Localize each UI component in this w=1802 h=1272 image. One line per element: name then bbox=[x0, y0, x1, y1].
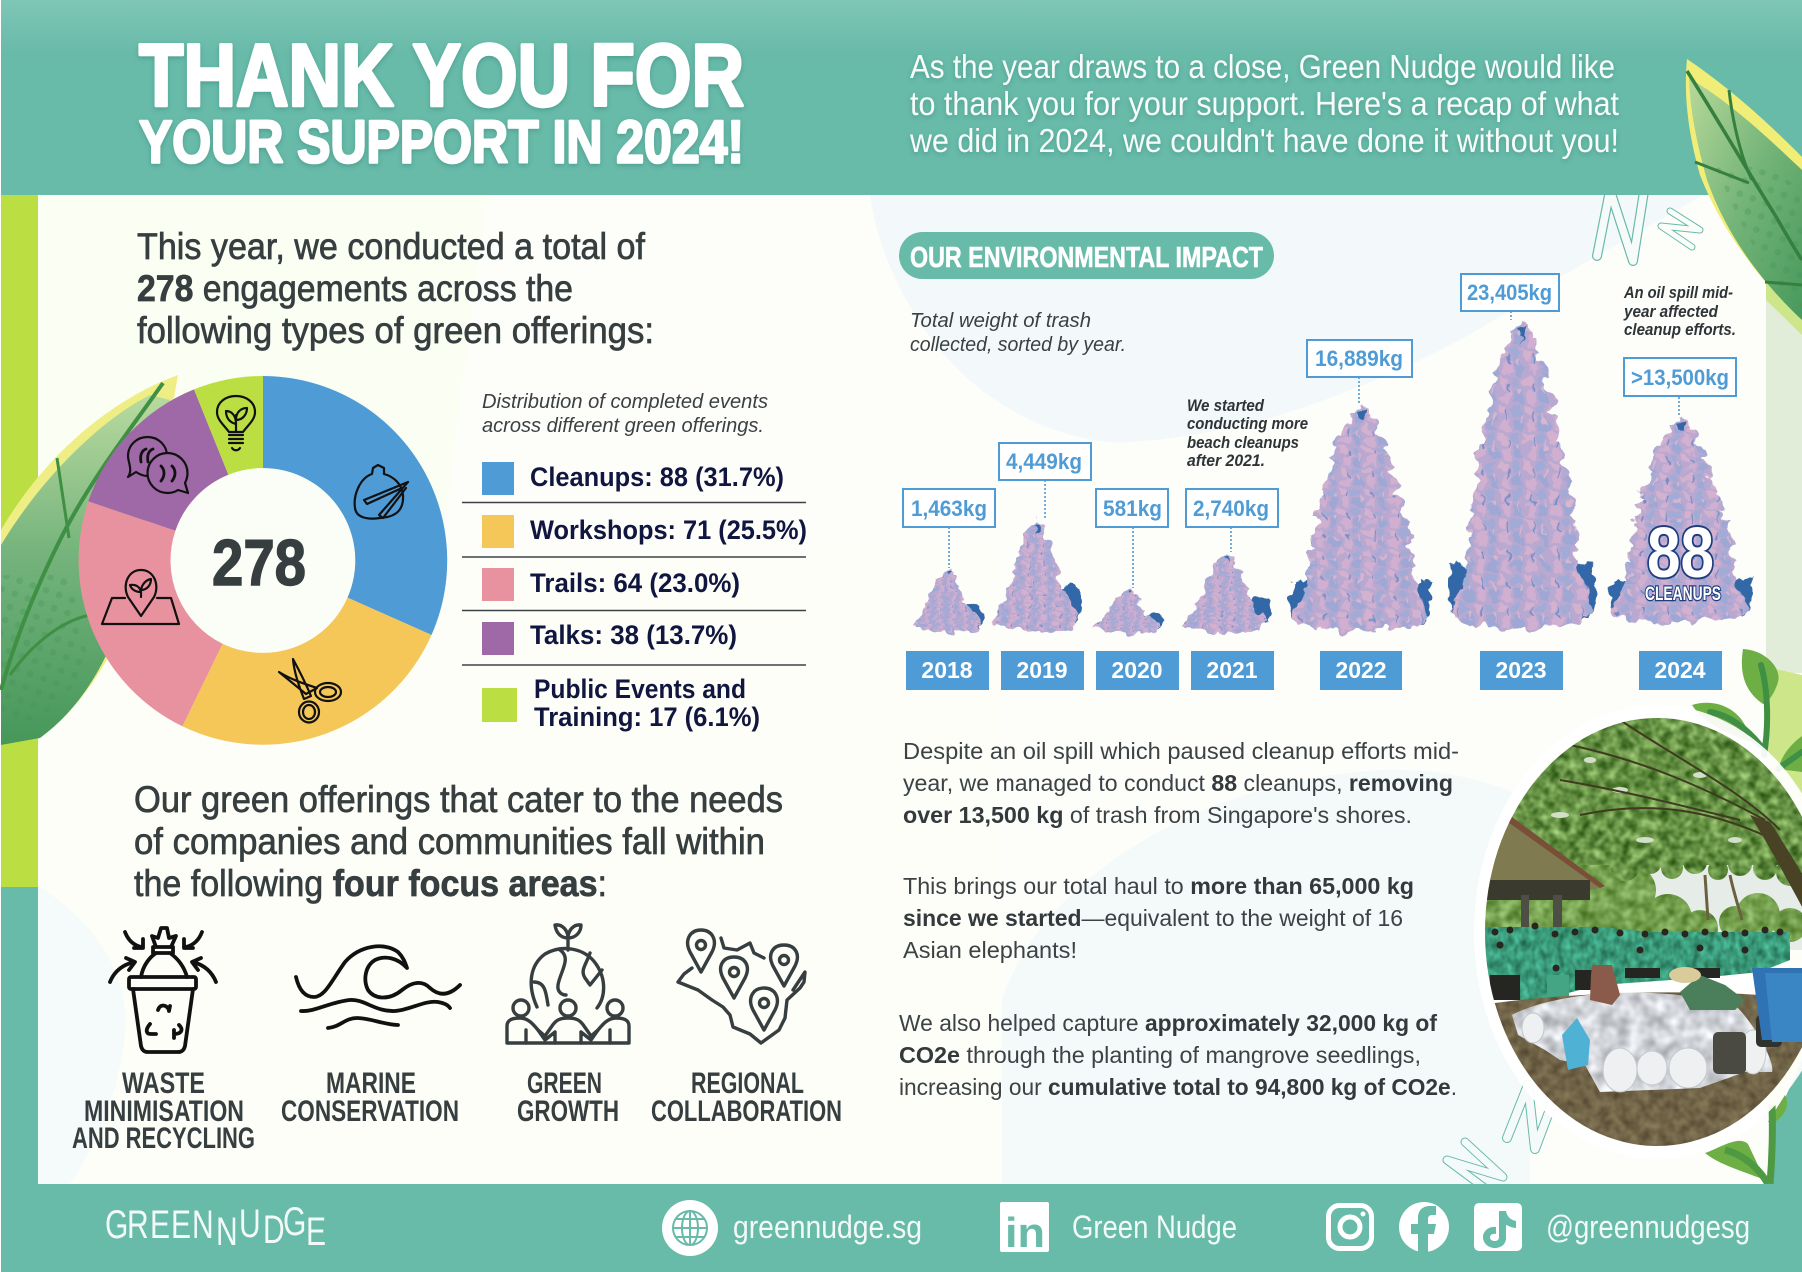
header intro text: to thank you for your support. Here's a recap of what bbox=[910, 85, 1619, 122]
column: 2020: 581kg bbox=[1103, 496, 1162, 521]
icon: globe, sprout and people bbox=[507, 925, 629, 1043]
icon: map pin with sprout bbox=[102, 570, 179, 624]
callout: 88 cleanups: 88 bbox=[1647, 514, 1714, 593]
column: 2019: 2019 bbox=[1016, 657, 1068, 683]
label bbox=[651, 1067, 842, 1128]
page background bbox=[1, 195, 1802, 1185]
text block: total haul: since we started—equivalent to the weight of 16 bbox=[903, 905, 1403, 931]
icon: plant right top bbox=[1692, 649, 1802, 772]
annotation: beach cleanups: conducting more bbox=[1187, 415, 1308, 433]
website link bbox=[662, 1200, 922, 1256]
text block: carbon capture bbox=[899, 1010, 1457, 1100]
legend: talks bbox=[482, 620, 737, 655]
title bbox=[139, 26, 744, 176]
text block: cleanups summary bbox=[903, 738, 1459, 828]
right pale green strip bbox=[1766, 283, 1802, 673]
label bbox=[72, 1067, 255, 1155]
focus area: waste minimisation and recycling bbox=[72, 928, 255, 1155]
focus area: marine conservation bbox=[281, 946, 460, 1128]
legend: public events and training bbox=[482, 674, 760, 732]
text block: carbon capture: increasing our cumulative total to 94,800 kg of CO2e. bbox=[899, 1074, 1457, 1100]
icon: facebook bbox=[1399, 1202, 1449, 1252]
heading: focus areas: Our green offerings that cater to the needs bbox=[134, 779, 783, 820]
label: AND RECYCLING bbox=[72, 1122, 255, 1155]
chart caption bbox=[910, 310, 1126, 356]
column: 2023: 23,405kg bbox=[1467, 280, 1552, 305]
legend: public events and training: Public Events and bbox=[534, 674, 746, 704]
title: THANK YOU FOR bbox=[139, 26, 744, 124]
lime side bar bbox=[1, 195, 38, 887]
legend: public events and training: Training: 17 (6.1%) bbox=[534, 702, 760, 732]
text block: total haul: Asian elephants! bbox=[903, 937, 1077, 963]
icon: tiktok bbox=[1474, 1203, 1522, 1251]
decorative outlined N letters top bbox=[1447, 185, 1700, 1192]
text block: cleanups summary: over 13,500 kg of trash from Singapore's shores. bbox=[903, 802, 1412, 828]
header band bbox=[1, 0, 1802, 195]
segment: talks bbox=[88, 389, 228, 531]
text block: carbon capture: We also helped capture approximately 32,000 kg of bbox=[899, 1010, 1437, 1036]
icon: speech bubbles with quotes bbox=[128, 437, 188, 493]
icon: trash bag and tongs bbox=[355, 465, 408, 519]
label bbox=[281, 1067, 459, 1128]
social media links: @greennudgesg bbox=[1546, 1209, 1750, 1245]
icon: wave bbox=[296, 946, 460, 1028]
header intro text: we did in 2024, we couldn't have done it without you! bbox=[909, 122, 1619, 159]
label: CONSERVATION bbox=[281, 1095, 459, 1128]
label: GROWTH bbox=[517, 1095, 619, 1128]
sky bbox=[1650, 865, 1802, 950]
heading: focus areas: of companies and communities fall within bbox=[134, 821, 765, 862]
icon: linkedin bbox=[1000, 1202, 1049, 1256]
website link: greennudge.sg bbox=[733, 1209, 922, 1245]
callout: 88 cleanups: CLEANUPS bbox=[1645, 584, 1721, 605]
linkedin link bbox=[1000, 1202, 1237, 1256]
annotation: beach cleanups bbox=[1187, 397, 1308, 470]
donut centre bbox=[171, 468, 355, 652]
segment: workshops bbox=[182, 598, 432, 745]
annotation: oil spill: cleanup efforts. bbox=[1624, 321, 1736, 339]
legend: workshops: Workshops: 71 (25.5%) bbox=[530, 515, 807, 545]
heading: engagements bbox=[137, 226, 654, 351]
legend: cleanups: Cleanups: 88 (31.7%) bbox=[530, 462, 784, 492]
column: 2022: 16,889kg bbox=[1315, 346, 1403, 371]
header intro text bbox=[909, 48, 1619, 159]
segment: trails bbox=[79, 501, 223, 726]
column: 2019 bbox=[992, 443, 1091, 690]
label: MINIMISATION bbox=[84, 1095, 244, 1128]
social media links bbox=[1328, 1202, 1750, 1252]
column: 2022 bbox=[1290, 340, 1433, 690]
column: 2024 bbox=[1609, 358, 1753, 690]
legend bbox=[462, 391, 807, 732]
label bbox=[517, 1067, 619, 1128]
column: 2019: 4,449kg bbox=[1006, 449, 1082, 474]
legend: talks: Talks: 38 (13.7%) bbox=[530, 620, 737, 650]
mid trees bbox=[1480, 840, 1802, 946]
column: 2021: 2021 bbox=[1206, 657, 1258, 683]
column: 2024: >13,500kg bbox=[1631, 365, 1729, 390]
right teal corner bbox=[1773, 1060, 1802, 1184]
tree canopy bbox=[1480, 710, 1802, 886]
focus area: green growth bbox=[507, 925, 629, 1128]
section heading pill: our environmental impact bbox=[899, 232, 1274, 279]
logo: Green Nudge: GREENNUDGE bbox=[105, 1200, 326, 1254]
segment: cleanups bbox=[263, 376, 447, 635]
segment: public events and training bbox=[194, 376, 263, 475]
icon: scissors bbox=[279, 659, 341, 722]
label: COLLABORATION bbox=[651, 1095, 842, 1128]
column: 2018: 1,463kg bbox=[911, 496, 987, 521]
linkedin link: Green Nudge bbox=[1072, 1209, 1237, 1245]
pale blue background bottom left bbox=[38, 885, 125, 1184]
icon: bin with bag and arrows bbox=[110, 928, 216, 1052]
column: 2024: 2024 bbox=[1654, 657, 1706, 683]
column: 2020: 2020 bbox=[1111, 657, 1163, 683]
column: 2021 bbox=[1183, 489, 1278, 690]
teal side bar bbox=[1, 887, 38, 1184]
text block: cleanups summary: year, we managed to conduct 88 cleanups, removing bbox=[903, 770, 1453, 796]
annotation: beach cleanups: after 2021. bbox=[1187, 452, 1265, 470]
icon: instagram bbox=[1328, 1206, 1372, 1248]
heading: focus areas bbox=[134, 779, 783, 904]
heading: engagements: This year, we conducted a total of bbox=[137, 226, 646, 267]
focus area: regional collaboration bbox=[651, 930, 842, 1128]
icon: light bulb with leaves bbox=[217, 396, 255, 450]
legend caption: Distribution of completed events bbox=[482, 391, 768, 413]
chart caption: collected, sorted by year. bbox=[910, 334, 1126, 356]
pavilion bbox=[1480, 817, 1605, 890]
column: 2022: 2022 bbox=[1335, 657, 1387, 683]
right lime strip bbox=[1766, 283, 1802, 1110]
icon: plant right bottom bbox=[1705, 1095, 1787, 1184]
column: 2018 bbox=[903, 489, 995, 690]
label: WASTE bbox=[122, 1067, 205, 1100]
left pale green background panel bbox=[38, 195, 488, 560]
legend: trails: Trails: 64 (23.0%) bbox=[530, 568, 740, 598]
pale blue background arc bottom bbox=[1002, 770, 1530, 1184]
column: 2021: 2,740kg bbox=[1193, 496, 1269, 521]
icon: map with pins bbox=[678, 930, 805, 1043]
icon: leaf top right bbox=[1686, 59, 1802, 320]
column: 2020 bbox=[1092, 489, 1179, 690]
icon: linkedin: in bbox=[1005, 1209, 1045, 1256]
legend caption: across different green offerings. bbox=[482, 415, 764, 437]
footer band bbox=[1, 1184, 1802, 1272]
column: 2023 bbox=[1448, 274, 1596, 690]
section heading pill: our environmental impact: OUR ENVIRONMENTAL IMPACT bbox=[910, 242, 1263, 274]
label: GREEN bbox=[527, 1067, 602, 1100]
column: 2018: 2018 bbox=[921, 657, 973, 683]
people bbox=[1482, 927, 1790, 1000]
icon: globe bbox=[662, 1200, 718, 1256]
photo: cleanup volunteers group bbox=[1474, 705, 1802, 1159]
heading: engagements: following types of green offerings: bbox=[137, 310, 654, 351]
ground bbox=[1482, 992, 1802, 1150]
annotation: oil spill: An oil spill mid- bbox=[1623, 284, 1733, 302]
chart caption: Total weight of trash bbox=[910, 310, 1091, 332]
icon: leaf left bbox=[1, 375, 178, 745]
annotation: beach cleanups: beach cleanups bbox=[1187, 434, 1299, 452]
legend caption bbox=[482, 391, 768, 437]
text block: cleanups summary: Despite an oil spill which paused cleanup efforts mid- bbox=[903, 738, 1459, 764]
text block: carbon capture: CO2e through the planting of mangrove seedlings, bbox=[899, 1042, 1421, 1068]
label: MARINE bbox=[326, 1067, 416, 1100]
heading: engagements: 278 engagements across the bbox=[137, 268, 573, 309]
label: REGIONAL bbox=[691, 1067, 804, 1100]
text block: total haul: This brings our total haul to more than 65,000 kg bbox=[903, 873, 1414, 899]
heading: focus areas: the following four focus areas: bbox=[134, 863, 607, 904]
pale blue background arc top bbox=[870, 195, 1700, 443]
text block: total haul bbox=[903, 873, 1414, 963]
header intro text: As the year draws to a close, Green Nudge would like bbox=[910, 48, 1615, 85]
annotation: oil spill: year affected bbox=[1623, 303, 1719, 321]
annotation: oil spill bbox=[1623, 284, 1736, 339]
donut chart bbox=[79, 376, 447, 745]
trash bags bbox=[1512, 993, 1772, 1092]
title: YOUR SUPPORT IN 2024! bbox=[139, 108, 744, 176]
annotation: beach cleanups: We started bbox=[1187, 397, 1265, 415]
donut total: 278 bbox=[212, 526, 306, 599]
sky gaps in canopy bbox=[1551, 757, 1742, 843]
pile chart: trash by year bbox=[903, 274, 1753, 690]
column: 2023: 2023 bbox=[1495, 657, 1547, 683]
